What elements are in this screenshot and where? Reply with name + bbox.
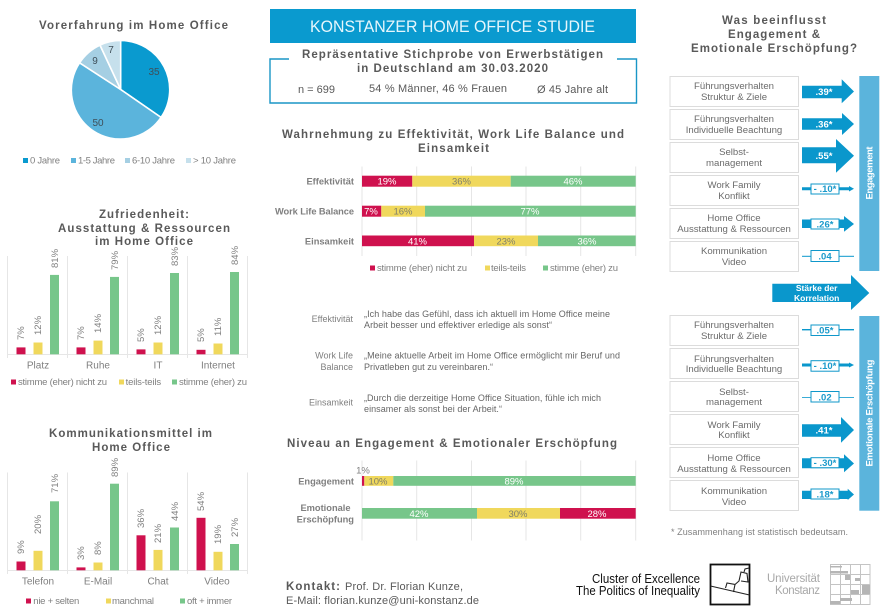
panel: Niveau stacked bars	[287, 438, 636, 540]
arrows: Erschöpfung: .41*	[816, 426, 833, 436]
bars: Video	[196, 518, 239, 570]
panel: Wahrnehmung stacked bars	[275, 129, 636, 274]
legend	[370, 263, 618, 274]
row: Effektivität: 46%	[563, 176, 583, 188]
heading: Niveau: Niveau an Engagement & Emotionaler Erschöpfung	[287, 438, 617, 450]
value labels: 12%	[33, 315, 44, 335]
pie legend: 1-5 Jahre	[78, 156, 115, 166]
arrows: Engagement: .55*	[816, 151, 833, 162]
value labels: 27%	[230, 517, 241, 537]
bars: Telefon	[16, 501, 59, 570]
factor boxes: Erschöpfung	[670, 316, 798, 510]
row: Work Life Balance: 7%	[364, 206, 378, 218]
row: Engagement: 1%	[356, 466, 370, 476]
row: Engagement: 10%	[368, 476, 388, 488]
arrows: Erschöpfung: .02	[818, 392, 832, 404]
value labels: 83%	[170, 246, 181, 266]
factor boxes: Erschöpfung: Home Office	[707, 453, 761, 464]
item: Work Life Balance: Work Life	[315, 350, 353, 360]
value labels: 20%	[33, 514, 44, 534]
heading: Wahrnehmung	[282, 129, 624, 155]
item: Effektivität: Arbeit besser und effektiver erledige als sonst“	[364, 320, 552, 330]
sample facts: n = 699	[298, 84, 335, 96]
sample heading: Repräsentative Stichprobe von Erwerbstätigen	[302, 49, 603, 61]
pie value labels	[92, 45, 160, 129]
heading: Was beeinflusst: Engagement &	[728, 29, 820, 41]
heading: Was beeinflusst	[691, 15, 857, 55]
item: Work Life Balance: Privatleben gut zu vereinbaren.“	[364, 362, 493, 372]
logo: Universität Konstanz: Universität	[767, 573, 821, 585]
value labels: 81%	[50, 248, 61, 268]
row: Einsamkeit: 36%	[577, 236, 597, 248]
arrows: Engagement: .26*	[817, 220, 834, 230]
item: Effektivität: Effektivität	[312, 314, 353, 324]
row: Work Life Balance: 77%	[520, 206, 540, 218]
row: Emotionale Erschöpfung: Emotionale	[300, 503, 351, 513]
heading: Kommunikationsmittel: Kommunikationsmittel im	[49, 428, 212, 440]
value labels: 7%	[16, 326, 27, 340]
bars: E-Mail	[76, 484, 119, 570]
category labels: Platz	[27, 360, 49, 372]
row: Emotionale Erschöpfung: 30%	[508, 509, 528, 520]
text block: survey items	[309, 309, 620, 414]
bars: Chat	[136, 528, 179, 570]
value labels: 84%	[230, 245, 241, 265]
logo: Cluster of Excellence: Cluster of Excellence	[592, 572, 700, 586]
item: Effektivität: „Ich habe das Gefühl, dass ich aktuell im Home Office meine	[364, 309, 610, 319]
factor boxes: Engagement: Führungsverhalten	[694, 114, 774, 125]
title banner: KONSTANZER HOME OFFICE STUDIE	[310, 18, 595, 36]
contact block: Kontakt:	[286, 581, 340, 593]
item: Einsamkeit: „Durch die derzeitige Home Office Situation, fühle ich mich	[364, 393, 601, 403]
heading: Wahrnehmung: Wahrnehmung zu Effektivität, Work Life Balance und	[282, 129, 624, 141]
row: Effektivität: 19%	[377, 176, 397, 188]
arrows: Erschöpfung	[802, 325, 854, 500]
factor boxes: Erschöpfung: management	[706, 397, 762, 408]
legend: manchmal	[112, 596, 154, 607]
legend: teils-teils	[491, 263, 526, 274]
heading: Kommunikationsmittel	[49, 428, 212, 454]
row: Einsamkeit	[305, 236, 636, 248]
panel: Vorerfahrung pie chart	[23, 20, 236, 166]
factor boxes: Erschöpfung: Individuelle Beachtung	[686, 364, 782, 375]
category labels: Chat	[147, 576, 169, 588]
category labels	[22, 576, 230, 588]
arrows: Erschöpfung: - .30*	[814, 458, 837, 469]
category labels	[27, 360, 235, 372]
sample heading: in Deutschland am 30.03.2020	[357, 63, 548, 75]
category labels: Telefon	[22, 576, 54, 588]
item: Work Life Balance	[315, 350, 620, 372]
sample facts: 54 % Männer, 46 % Frauen	[369, 83, 507, 95]
factor boxes: Engagement: Video	[722, 257, 746, 268]
value labels: 5%	[136, 328, 147, 342]
pie value labels: 35	[148, 67, 160, 78]
factor boxes: Erschöpfung: Konflikt	[718, 430, 750, 441]
value labels: 5%	[196, 328, 207, 342]
legend: nie + selten	[33, 596, 79, 607]
pie legend	[23, 156, 236, 166]
row: Engagement: Engagement	[298, 476, 354, 486]
factor boxes: Erschöpfung: Struktur & Ziele	[701, 331, 767, 342]
arrows: Engagement: .36*	[816, 120, 833, 130]
factor boxes: Erschöpfung: Kommunikation	[701, 486, 767, 497]
factor boxes: Engagement: Individuelle Beachtung	[686, 125, 782, 136]
category labels: Video	[204, 576, 230, 588]
pie legend: > 10 Jahre	[193, 156, 236, 166]
footnote: * Zusammenhang ist statistisch bedeutsam.	[671, 527, 848, 537]
heading: Was beeinflusst: Emotionale Erschöpfung?	[691, 43, 857, 55]
factor boxes: Engagement: Kommunikation	[701, 246, 767, 257]
arrow: Stärke der Korrelation: Stärke der	[796, 283, 838, 293]
legend	[26, 596, 232, 607]
legend	[11, 377, 247, 388]
factor boxes: Engagement: Konflikt	[718, 191, 750, 202]
axis and grid	[7, 256, 248, 358]
item: Einsamkeit: Einsamkeit	[309, 398, 353, 408]
row: Emotionale Erschöpfung: 42%	[409, 509, 429, 520]
row: Effektivität	[306, 176, 636, 188]
arrows: Erschöpfung: .18*	[817, 490, 834, 500]
heading: Zufriedenheit: Zufriedenheit:	[99, 209, 189, 221]
row: Einsamkeit: Einsamkeit	[305, 236, 354, 246]
value labels: 89%	[110, 457, 121, 477]
grid lines	[362, 166, 636, 256]
factor boxes: Engagement: Führungsverhalten	[694, 81, 774, 92]
value labels: 8%	[93, 541, 104, 555]
heading: Wahrnehmung: Einsamkeit	[418, 143, 489, 155]
panel: sample description	[270, 49, 636, 103]
row: Work Life Balance	[275, 206, 636, 218]
value labels: 71%	[50, 473, 61, 493]
logo: Cluster of Excellence: The Politics of Inequality	[576, 584, 701, 598]
logo: Cluster of Excellence	[576, 564, 750, 604]
value labels: 54%	[196, 491, 207, 511]
outcome bar: Emotionale Erschöpfung	[859, 316, 879, 511]
pie value labels: 7	[108, 45, 114, 56]
heading: Zufriedenheit: Ausstattung & Ressourcen	[58, 223, 230, 235]
logo: Universität Konstanz	[767, 564, 870, 604]
legend: stimme (eher) zu	[550, 263, 618, 274]
factor boxes: Erschöpfung: Video	[722, 497, 746, 508]
item: Einsamkeit: einsamer als sonst bei der Arbeit.“	[364, 404, 502, 414]
panel: Zufriedenheit bar chart	[7, 209, 248, 388]
value labels: 79%	[110, 250, 121, 270]
item: Effektivität	[312, 309, 610, 330]
sample facts	[298, 83, 608, 96]
outcome bar: Emotionale Erschöpfung: Emotionale Erschöpfung	[864, 359, 876, 466]
arrow: Stärke der Korrelation: Korrelation	[794, 293, 839, 303]
pie value labels: 9	[92, 56, 98, 67]
row: Engagement: 89%	[504, 476, 524, 488]
panel: correlations	[670, 15, 879, 537]
arrows: Erschöpfung: - .10*	[814, 361, 837, 372]
heading: Vorerfahrung: Vorerfahrung im Home Office	[39, 20, 228, 32]
item: Work Life Balance: „Meine aktuelle Arbeit im Home Office ermöglicht mir Beruf und	[364, 350, 620, 360]
item: Einsamkeit	[309, 393, 601, 414]
box outline	[270, 59, 636, 103]
row: Engagement	[298, 466, 636, 488]
factor boxes: Engagement: Home Office	[707, 213, 761, 224]
factor boxes: Engagement: Struktur & Ziele	[701, 92, 767, 103]
category labels: Internet	[201, 360, 235, 372]
arrows: Engagement	[802, 79, 854, 262]
bars: Internet	[196, 272, 239, 354]
value labels: 14%	[93, 313, 104, 333]
pie legend: 0 Jahre	[30, 156, 60, 166]
heading: Was beeinflusst: Was beeinflusst	[722, 15, 826, 27]
arrows: Erschöpfung: .05*	[817, 326, 834, 336]
value labels	[16, 245, 241, 342]
item: Work Life Balance: Balance	[320, 362, 353, 372]
legend: oft + immer	[187, 596, 232, 607]
value labels: 12%	[153, 315, 164, 335]
outcome bar: Engagement: Engagement	[864, 146, 876, 200]
pie legend: 6-10 Jahre	[132, 156, 175, 166]
outcome bar: Engagement	[859, 76, 879, 271]
row: Emotionale Erschöpfung: 28%	[587, 509, 607, 520]
arrows: Engagement: - .10*	[814, 184, 837, 195]
row: Work Life Balance: Work Life Balance	[275, 206, 354, 216]
sample heading	[302, 49, 603, 75]
heading: Zufriedenheit	[58, 209, 230, 248]
legend: teils-teils	[126, 377, 161, 388]
grid lines	[362, 460, 636, 540]
factor boxes: Engagement	[670, 76, 798, 272]
legend: stimme (eher) zu	[179, 377, 247, 388]
factor boxes: Engagement: management	[706, 158, 762, 169]
row: Einsamkeit: 23%	[496, 236, 516, 248]
legend: stimme (eher) nicht zu	[377, 263, 467, 274]
bars: Platz	[16, 275, 59, 354]
factor boxes: Erschöpfung: Führungsverhalten	[694, 354, 774, 365]
factor boxes: Engagement: Selbst-	[719, 147, 749, 158]
row: Emotionale Erschöpfung	[297, 503, 636, 524]
value labels: 9%	[16, 540, 27, 554]
logo: Universität Konstanz: Konstanz	[775, 585, 820, 597]
row: Work Life Balance: 16%	[393, 206, 413, 218]
value labels: 21%	[153, 523, 164, 543]
contact block: E-Mail: florian.kunze@uni-konstanz.de	[286, 595, 479, 607]
value labels: 36%	[136, 508, 147, 528]
row: Effektivität: 36%	[452, 176, 472, 188]
pie value labels: 50	[92, 118, 104, 129]
value labels: 7%	[76, 326, 87, 340]
category labels: IT	[154, 360, 162, 372]
row: Einsamkeit: 41%	[408, 236, 428, 248]
factor boxes: Erschöpfung: Selbst-	[719, 387, 749, 398]
value labels: 3%	[76, 546, 87, 560]
axis and grid	[7, 472, 248, 574]
category labels: E-Mail	[84, 576, 112, 588]
category labels: Ruhe	[86, 360, 110, 372]
contact block: Prof. Dr. Florian Kunze,	[345, 581, 463, 593]
sample facts: Ø 45 Jahre alt	[537, 84, 608, 96]
value labels	[16, 457, 241, 560]
bars: Ruhe	[76, 277, 119, 354]
row: Emotionale Erschöpfung: Erschöpfung	[297, 514, 354, 524]
heading: Kommunikationsmittel: Home Office	[92, 442, 170, 454]
factor boxes: Engagement: Work Family	[707, 180, 761, 191]
factor boxes: Engagement: Ausstattung & Ressourcen	[677, 224, 791, 235]
bars: IT	[136, 273, 179, 354]
contact block	[286, 581, 479, 607]
value labels: 44%	[170, 501, 181, 521]
value labels: 19%	[213, 524, 224, 544]
factor boxes: Erschöpfung: Führungsverhalten	[694, 320, 774, 331]
arrows: Engagement: .39*	[816, 87, 833, 98]
legend: stimme (eher) nicht zu	[18, 377, 107, 388]
arrows: Engagement: .04	[818, 252, 832, 262]
factor boxes: Erschöpfung: Ausstattung & Ressourcen	[677, 464, 791, 475]
value labels: 11%	[213, 317, 224, 336]
panel: Kommunikationsmittel bar chart	[7, 428, 248, 607]
arrow: Stärke der Korrelation	[772, 275, 869, 310]
pie chart	[71, 40, 170, 139]
heading: Zufriedenheit: im Home Office	[95, 236, 193, 248]
row: Effektivität: Effektivität	[306, 176, 354, 186]
title banner	[270, 9, 636, 43]
factor boxes: Erschöpfung: Work Family	[707, 420, 761, 431]
